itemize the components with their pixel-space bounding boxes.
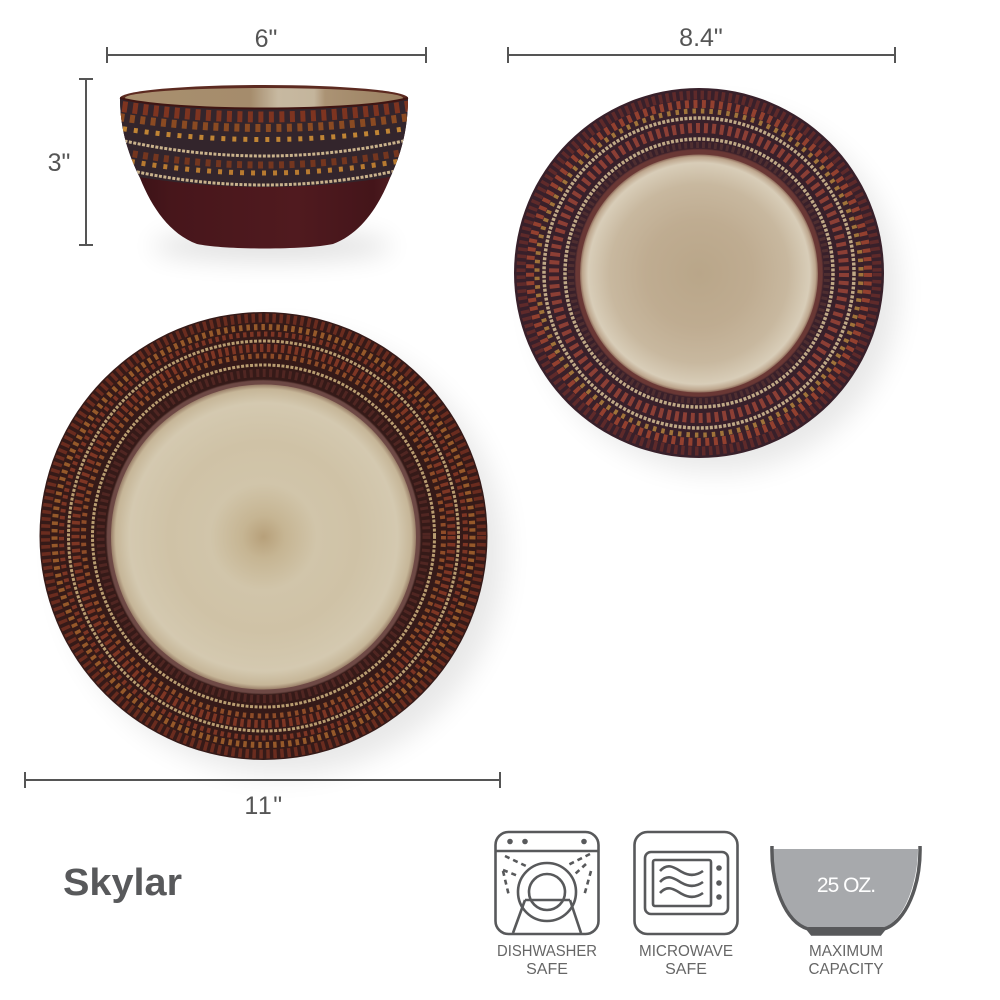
salad plate pattern rings	[521, 95, 877, 451]
dimension: dinner plate width 11 inches: 11"	[244, 792, 284, 820]
label: maximum capacity: MAXIMUM	[809, 943, 883, 960]
dimension: salad plate width 8.4 inches	[508, 24, 895, 63]
label: maximum capacity: CAPACITY	[808, 961, 884, 978]
dimension: bowl width 6 inches	[107, 25, 426, 63]
capacity value: 25 OZ.	[817, 874, 875, 897]
dinner plate	[40, 312, 504, 775]
label: dishwasher safe: SAFE	[526, 961, 568, 978]
title: Skylar: Skylar	[63, 862, 182, 904]
salad plate	[514, 88, 898, 472]
dimension: bowl width 6 inches: 6"	[255, 25, 277, 53]
dimension: dinner plate width 11 inches	[25, 772, 500, 820]
salad plate gold dotted rings	[544, 118, 854, 428]
salad plate shadow	[534, 108, 898, 472]
dimension: salad plate width 8.4 inches: 8.4"	[679, 24, 723, 52]
icon: maximum capacity bowl	[772, 846, 920, 934]
label: dishwasher safe: DISHWASHER	[497, 943, 597, 960]
dinner plate pattern rings	[46, 318, 482, 754]
dimension: bowl height 3 inches: 3"	[48, 149, 70, 177]
bowl shadow	[152, 232, 392, 260]
bowl	[110, 85, 420, 260]
dinner plate shadow	[60, 331, 504, 775]
icon: microwave safe	[634, 832, 738, 934]
bowl gold dotted lines	[120, 140, 408, 156]
salad plate centre well	[575, 149, 823, 397]
label: microwave safe: SAFE	[665, 961, 707, 978]
label: microwave safe: MICROWAVE	[639, 943, 733, 960]
dimension: bowl height 3 inches	[48, 79, 93, 245]
salad plate rim	[514, 88, 884, 458]
icon: dishwasher safe	[496, 832, 598, 934]
bowl rim	[120, 98, 408, 108]
dinner plate rim	[40, 312, 488, 760]
bowl body with patterned band	[120, 99, 408, 248]
bowl interior	[120, 85, 408, 111]
dinner plate gold dotted rings	[68, 341, 458, 731]
dinner plate centre well	[106, 380, 420, 694]
